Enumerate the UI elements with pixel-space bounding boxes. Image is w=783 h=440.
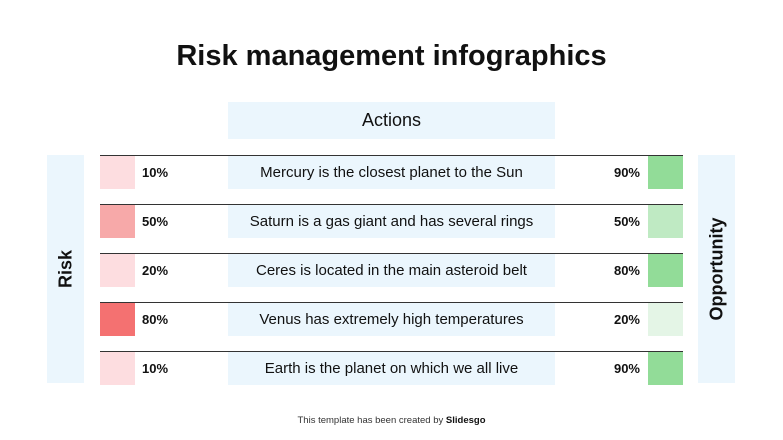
row 2: Saturn is a gas giant and has several rings — [250, 213, 533, 230]
row 4 — [100, 302, 683, 336]
row 2: 50% — [614, 214, 640, 229]
row 2: 50% — [142, 214, 168, 229]
row 5: 90% — [614, 361, 640, 376]
row 5: Earth is the planet on which we all live — [265, 360, 518, 377]
panel: opportunity label: Opportunity — [706, 218, 726, 320]
header: actions — [228, 102, 555, 139]
row 1: 90% — [614, 165, 640, 180]
row 1: 10% — [142, 165, 168, 180]
row 1: Mercury is the closest planet to the Sun — [260, 164, 523, 181]
panel: risk label — [47, 155, 84, 383]
title: Risk management infographics — [176, 40, 607, 72]
row 4: 20% — [614, 312, 640, 327]
footer credit: This template has been created by Slidesgo — [298, 415, 486, 426]
row 4: Venus has extremely high temperatures — [259, 311, 524, 328]
row 4: 80% — [142, 312, 168, 327]
row 3 — [100, 253, 683, 287]
row 3: 80% — [614, 263, 640, 278]
row 5 — [100, 351, 683, 385]
row 1 — [100, 155, 683, 189]
row 3: 20% — [142, 263, 168, 278]
header: actions: Actions — [362, 110, 421, 130]
row 5: 10% — [142, 361, 168, 376]
row 2 — [100, 204, 683, 238]
panel: risk label: Risk — [55, 250, 75, 288]
row 3: Ceres is located in the main asteroid belt — [256, 262, 527, 279]
panel: opportunity label — [698, 155, 735, 383]
